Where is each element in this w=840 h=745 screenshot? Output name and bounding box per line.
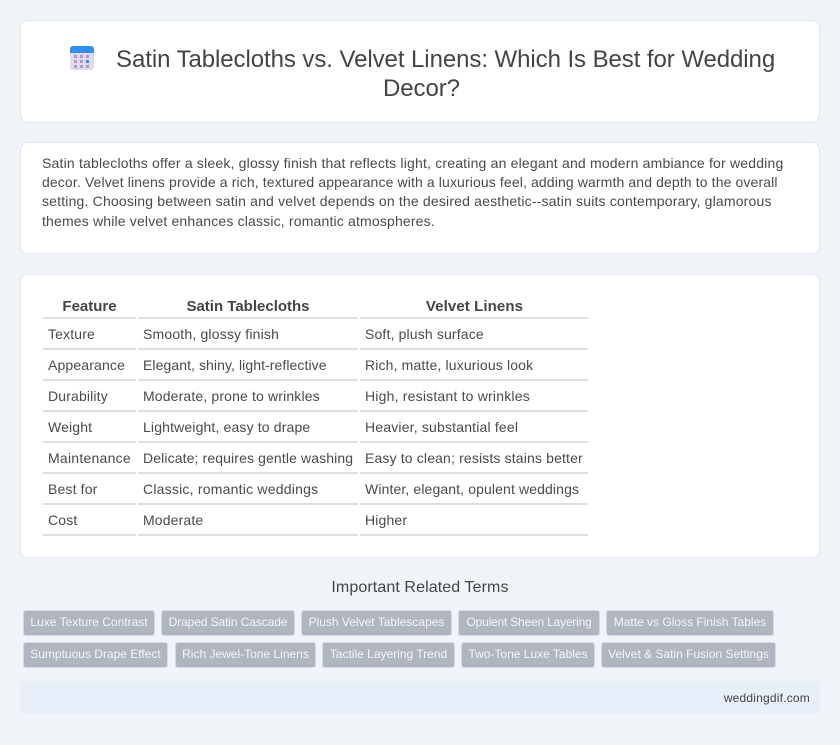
footer bar — [20, 681, 820, 714]
intro paragraph: setting. Choosing between satin and velvet depends on the desired aesthetic--satin suits contemporary, glamorous — [42, 193, 772, 209]
related terms tags — [23, 610, 776, 668]
comparison table — [43, 298, 588, 536]
related terms tags: Plush Velvet Tablescapes — [309, 615, 444, 629]
related terms tags: Draped Satin Cascade — [169, 615, 287, 629]
panel: comparison table card — [20, 274, 820, 558]
comparison table: Easy to clean; resists stains better — [365, 450, 583, 466]
related terms tags: Velvet & Satin Fusion Settings — [608, 647, 769, 661]
comparison table: Rich, matte, luxurious look — [365, 357, 533, 373]
intro paragraph: Satin tablecloths offer a sleek, glossy finish that reflects light, creating an elegant and modern ambiance for wedding — [42, 155, 783, 171]
comparison table: Classic, romantic weddings — [143, 481, 318, 497]
related terms tags: Sumptuous Drape Effect — [30, 647, 161, 661]
comparison table: Texture — [48, 326, 95, 342]
related terms tags: Rich Jewel-Tone Linens — [182, 647, 309, 661]
related terms tags: Tactile Layering Trend — [330, 647, 447, 661]
panel: title card — [20, 20, 820, 123]
title: Decor? — [383, 75, 460, 102]
comparison table: Weight — [48, 419, 92, 435]
comparison table: Heavier, substantial feel — [365, 419, 518, 435]
icon: calendar — [70, 46, 94, 70]
related terms tags: Luxe Texture Contrast — [30, 615, 148, 629]
intro paragraph: decor. Velvet linens provide a rich, textured appearance with a luxurious feel, adding warmth and depth to the overall — [42, 174, 778, 190]
table header row: Velvet Linens — [426, 298, 523, 315]
comparison table: Cost — [48, 512, 77, 528]
comparison table: High, resistant to wrinkles — [365, 388, 530, 404]
related terms tags: Two-Tone Luxe Tables — [468, 647, 588, 661]
table header row: Feature — [62, 298, 117, 315]
comparison table: Maintenance — [48, 450, 131, 466]
footer domain: weddingdif.com — [724, 691, 810, 705]
related terms tags: Opulent Sheen Layering — [466, 615, 592, 629]
related terms tags: Matte vs Gloss Finish Tables — [614, 615, 766, 629]
comparison table: Moderate, prone to wrinkles — [143, 388, 320, 404]
comparison table: Delicate; requires gentle washing — [143, 450, 353, 466]
comparison table: Higher — [365, 512, 407, 528]
title — [116, 46, 775, 102]
comparison table: Elegant, shiny, light-reflective — [143, 357, 327, 373]
table header row — [62, 298, 523, 315]
comparison table: Appearance — [48, 357, 125, 373]
panel: intro text — [20, 142, 820, 254]
related terms heading: Important Related Terms — [331, 579, 509, 596]
intro paragraph — [42, 155, 783, 229]
comparison table: Best for — [48, 481, 97, 497]
title: Satin Tablecloths vs. Velvet Linens: Which Is Best for Wedding — [116, 46, 775, 73]
comparison table: Winter, elegant, opulent weddings — [365, 481, 579, 497]
comparison table: Lightweight, easy to drape — [143, 419, 310, 435]
comparison table: Durability — [48, 388, 108, 404]
table header row: Satin Tablecloths — [186, 298, 310, 315]
intro paragraph: themes while velvet enhances classic, romantic atmospheres. — [42, 213, 435, 229]
comparison table: Smooth, glossy finish — [143, 326, 279, 342]
comparison table: Moderate — [143, 512, 203, 528]
comparison table: Soft, plush surface — [365, 326, 484, 342]
